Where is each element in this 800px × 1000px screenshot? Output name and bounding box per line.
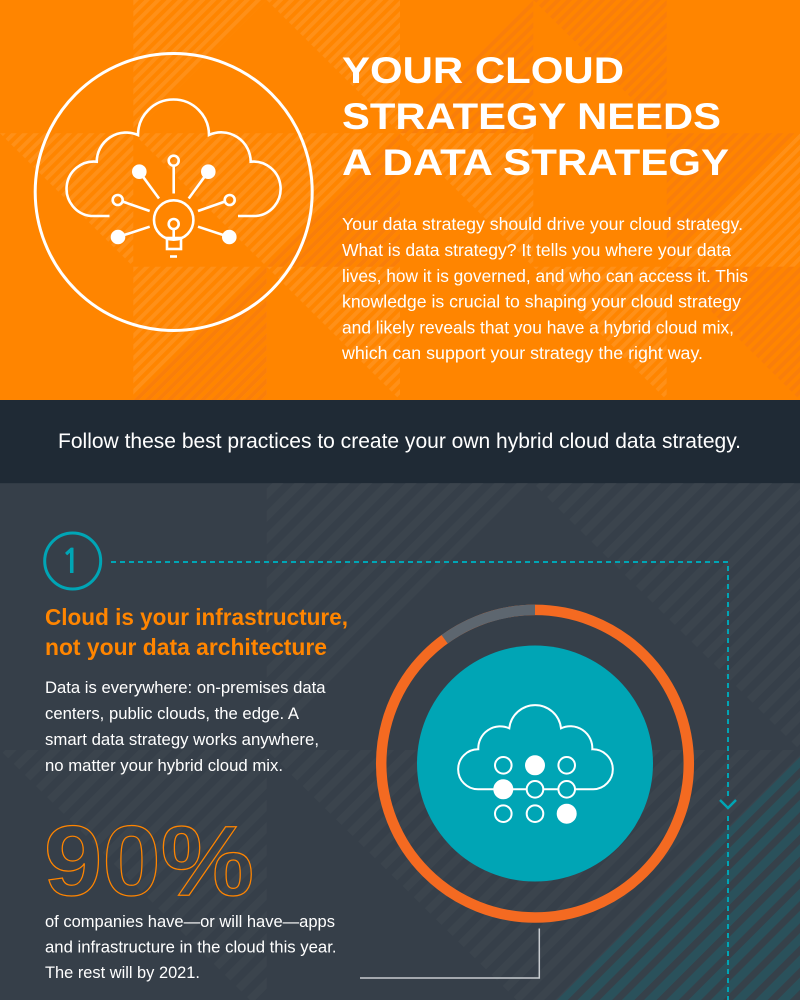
text block: intro (341, 214, 748, 363)
text block: intro: which can support your strategy the right way. (341, 343, 703, 363)
arrow: dashed connector (111, 562, 736, 1000)
text block: intro: Your data strategy should drive your cloud strategy. (342, 214, 743, 234)
heading: step 1: Cloud is your infrastructure, (45, 604, 348, 630)
banner (0, 400, 800, 483)
text block: step 1 body: centers, public clouds, the edge. A (45, 704, 300, 723)
text block: intro: What is data strategy? It tells you where your data (342, 240, 731, 260)
title: STRATEGY NEEDS (342, 95, 721, 137)
title (342, 49, 729, 183)
panel: dark section background (0, 483, 800, 1000)
text block: step 1 body: smart data strategy works anywhere, (45, 730, 319, 749)
callout line (360, 928, 539, 978)
panel: orange header background (0, 0, 800, 400)
text block: step 1 body: Data is everywhere: on-premises data (45, 678, 326, 697)
title: YOUR CLOUD (342, 49, 624, 91)
chart: 90% donut ring (381, 610, 689, 918)
heading: step 1 (45, 604, 348, 660)
text block: stat description: The rest will by 2021. (45, 963, 200, 982)
text block: step 1 body (45, 678, 326, 775)
text block: stat description: and infrastructure in the cloud this year. (45, 938, 336, 956)
icon: cloud with light bulb in circle (35, 54, 312, 330)
title: A DATA STRATEGY (342, 141, 729, 183)
text block: intro: lives, how it is governed, and who can access it. This (342, 266, 748, 286)
heading: step 1: not your data architecture (45, 634, 327, 660)
text block: step 1 body: no matter your hybrid cloud mix. (45, 756, 283, 775)
icon: step number 1 (45, 533, 101, 589)
banner: Follow these best practices to create your own hybrid cloud data strategy. (58, 430, 741, 453)
text block: intro: knowledge is crucial to shaping your cloud strategy (342, 292, 741, 312)
text block: stat description: of companies have—or will have—apps (45, 912, 335, 931)
stat: 90% outlined number: 90% (44, 805, 254, 916)
text block: stat description (45, 912, 336, 982)
icon: step number 1: 1 (61, 545, 81, 578)
icon: teal circle with cloud and data dots (417, 646, 653, 882)
text block: intro: and likely reveals that you have a hybrid cloud mix, (342, 318, 734, 338)
